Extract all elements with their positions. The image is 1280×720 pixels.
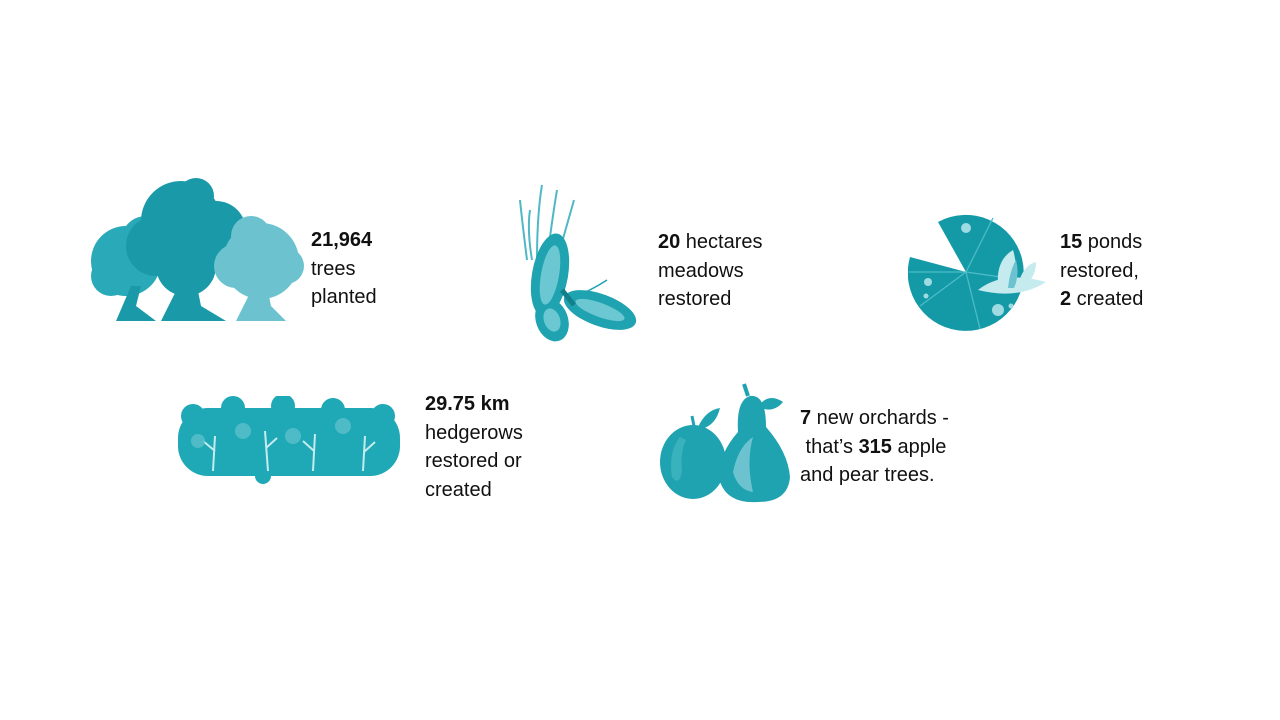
text: hedgerows: restored or — [425, 450, 522, 472]
text: meadows — [658, 231, 763, 310]
text: trees: trees — [311, 258, 355, 280]
text: trees: planted — [311, 286, 377, 308]
text: ponds — [1060, 231, 1143, 310]
icon: hedgerow — [178, 396, 400, 484]
text: ponds: restored, — [1060, 260, 1139, 282]
text: orchards: and pear trees. — [800, 464, 935, 486]
icon: butterfly with grass — [519, 184, 636, 342]
text: hedgerows: hedgerows — [425, 422, 523, 444]
text: hedgerows: 29.75 km — [425, 393, 510, 415]
text: hedgerows: created — [425, 478, 492, 500]
text: trees: 21,964 — [311, 229, 372, 251]
text: trees — [311, 229, 377, 308]
text: ponds: 15 ponds — [1060, 231, 1142, 253]
text: meadows: meadows — [658, 260, 744, 282]
text: meadows: 20 hectares — [658, 231, 763, 253]
icon: trees — [91, 178, 304, 321]
text: meadows: restored — [658, 288, 731, 310]
text: orchards: 7 new orchards - — [800, 407, 949, 429]
icon: apple and pear — [660, 383, 790, 502]
text: ponds: 2 created — [1060, 288, 1143, 310]
text: hedgerows — [425, 393, 523, 500]
text: orchards — [800, 407, 949, 486]
text: orchards: that’s 315 apple — [806, 436, 946, 458]
icon: lily pad — [908, 214, 1046, 331]
